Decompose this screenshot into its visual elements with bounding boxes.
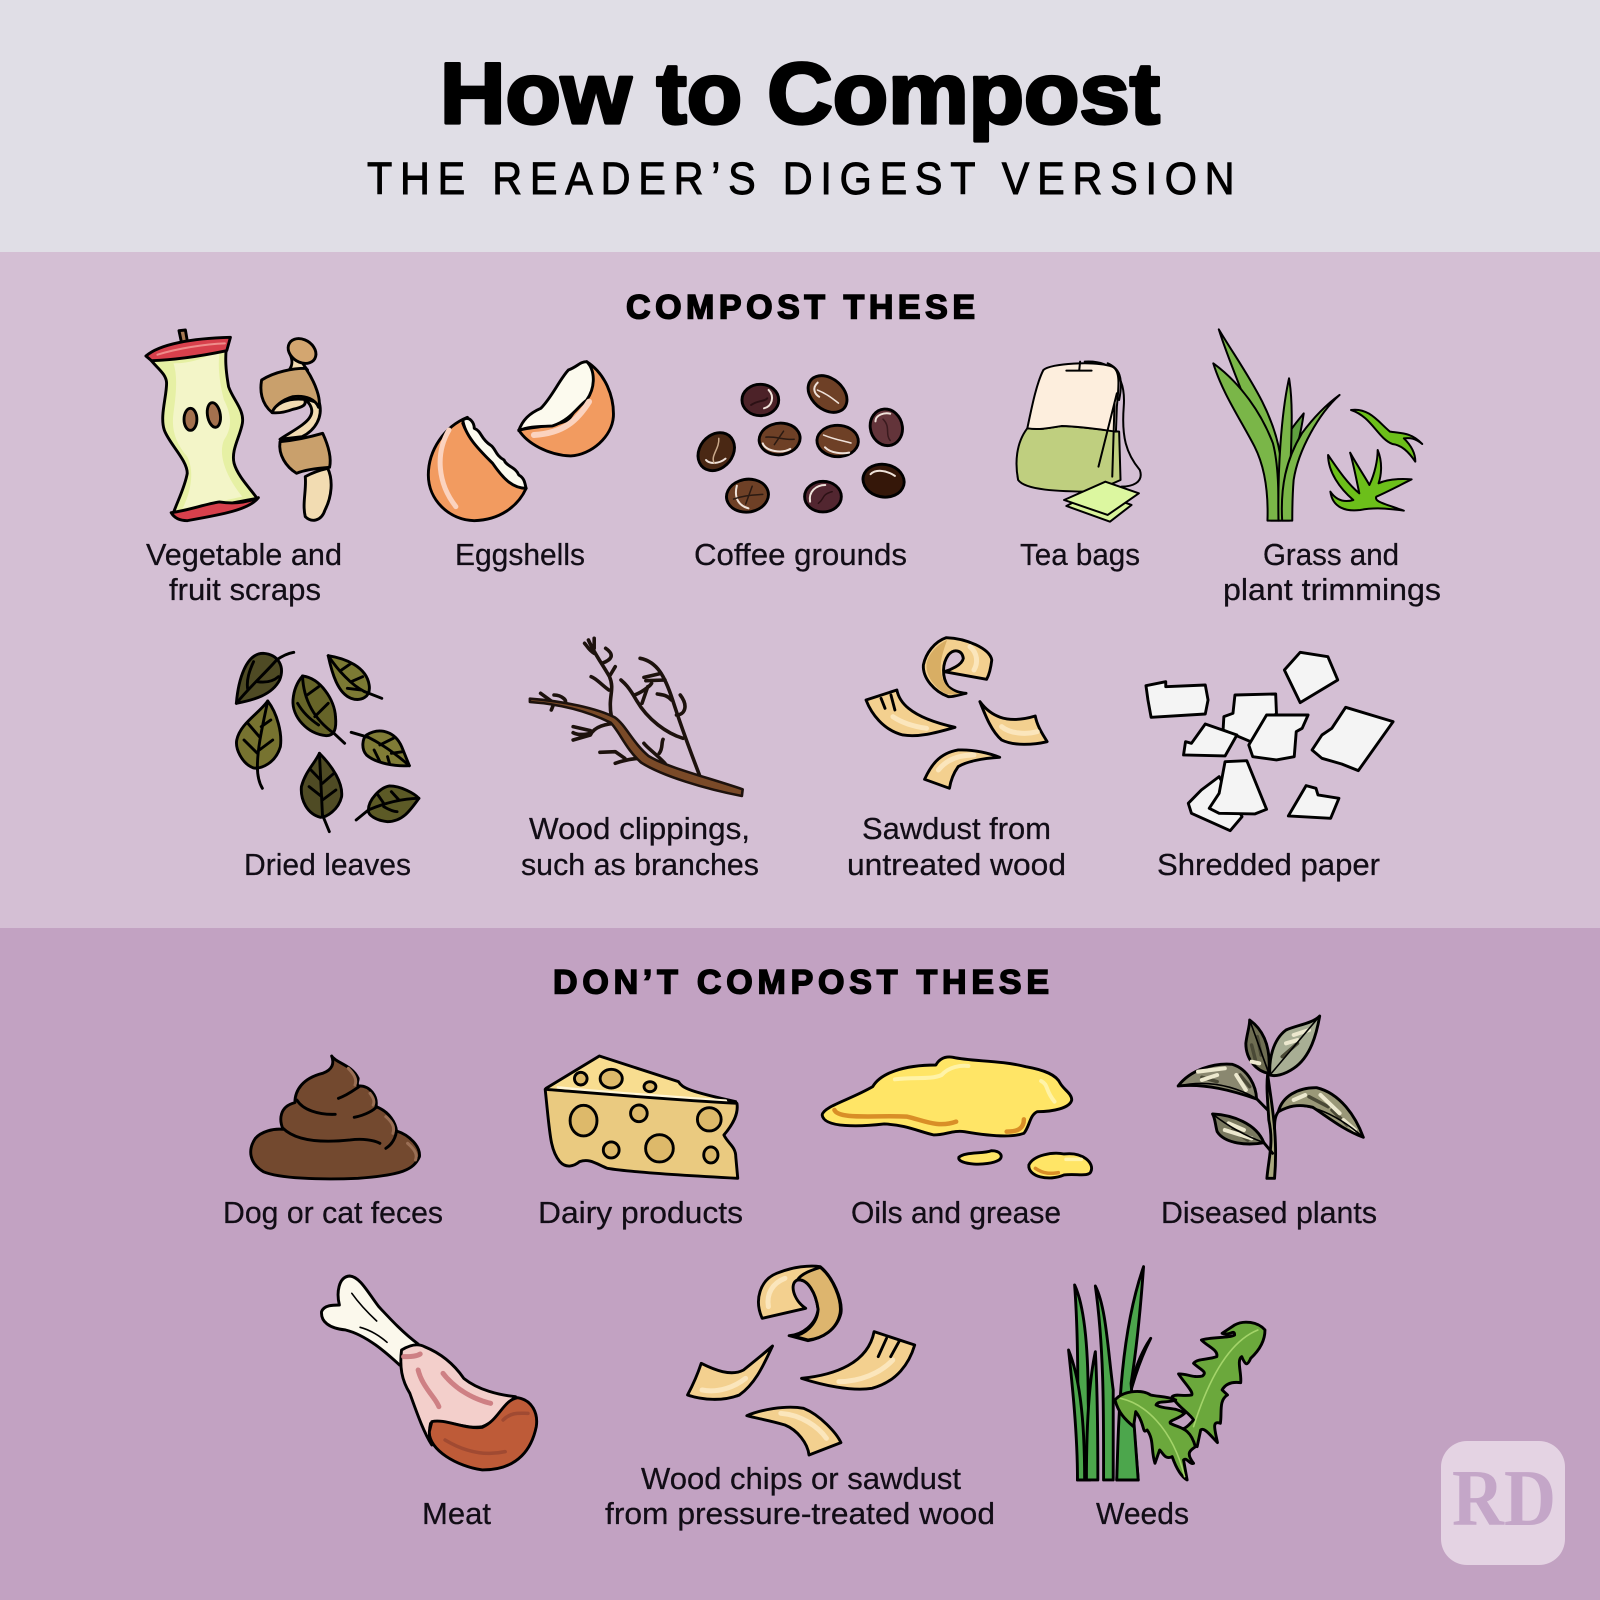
label: coffee grounds: Coffee grounds xyxy=(694,537,907,572)
label: dried leaves: Dried leaves xyxy=(244,847,411,882)
label: wood chips or sawdust from pressure-treated wood: from pressure-treated wood xyxy=(605,1496,995,1531)
icon: dried leaves xyxy=(236,652,419,832)
icon: grass and plant trimmings xyxy=(1213,329,1422,521)
icon: feces xyxy=(251,1056,420,1179)
icon: coffee grounds xyxy=(692,371,910,516)
icon: meat drumstick xyxy=(321,1276,537,1470)
label: tea bags: Tea bags xyxy=(1020,537,1140,572)
heading: compost these: COMPOST THESE xyxy=(626,288,975,326)
label: weeds: Weeds xyxy=(1096,1496,1189,1531)
icon: shredded paper xyxy=(1146,652,1393,831)
label: sawdust from untreated wood: untreated wood xyxy=(847,847,1066,882)
logo: RD badge: RD xyxy=(1452,1455,1556,1543)
heading: don't compost these: DON’T COMPOST THESE xyxy=(553,964,1049,1002)
label: grass and plant trimmings xyxy=(1223,537,1441,607)
panel: don't compost these xyxy=(0,928,1600,1600)
icon: diseased plant xyxy=(1178,1016,1363,1178)
label: vegetable and fruit scraps xyxy=(146,537,342,607)
icon: oil and grease xyxy=(822,1057,1092,1178)
label: meat: Meat xyxy=(422,1496,491,1531)
icon: eggshells xyxy=(428,362,613,521)
panel: compost these xyxy=(0,252,1600,928)
icon: tea bag xyxy=(1017,362,1141,522)
label: dairy products: Dairy products xyxy=(538,1195,743,1230)
label: wood clippings, such as branches: Wood clippings, xyxy=(529,811,750,846)
label: vegetable and fruit scraps: Vegetable and xyxy=(146,537,342,572)
label: grass and plant trimmings: Grass and xyxy=(1263,537,1399,572)
label: wood clippings, such as branches xyxy=(521,811,759,882)
label: sawdust from untreated wood: Sawdust from xyxy=(862,811,1051,846)
label: eggshells: Eggshells xyxy=(455,537,585,572)
icon: apple core and peel xyxy=(146,330,331,521)
icon: wood clippings branch xyxy=(530,638,743,796)
label: wood chips or sawdust from pressure-treated wood: Wood chips or sawdust xyxy=(641,1461,961,1496)
label: wood chips or sawdust from pressure-treated wood xyxy=(605,1461,995,1531)
icon: wood chips xyxy=(688,1266,915,1455)
icon: sawdust shavings xyxy=(866,638,1047,788)
label: oils and grease: Oils and grease xyxy=(851,1195,1061,1230)
panel: header xyxy=(0,0,1600,252)
label: diseased plants: Diseased plants xyxy=(1161,1195,1377,1230)
title: How to Compost xyxy=(440,46,1160,142)
label: sawdust from untreated wood xyxy=(847,811,1066,882)
label: shredded paper: Shredded paper xyxy=(1157,847,1380,882)
subtitle: THE READER’S DIGEST VERSION xyxy=(367,154,1235,204)
icon: weeds xyxy=(1069,1267,1265,1480)
label: grass and plant trimmings: plant trimmings xyxy=(1223,572,1441,607)
label: dog or cat feces: Dog or cat feces xyxy=(223,1195,443,1230)
label: vegetable and fruit scraps: fruit scraps xyxy=(169,572,321,607)
logo: RD badge xyxy=(1441,1441,1565,1565)
label: wood clippings, such as branches: such as branches xyxy=(521,847,759,882)
icon: cheese xyxy=(545,1056,738,1178)
